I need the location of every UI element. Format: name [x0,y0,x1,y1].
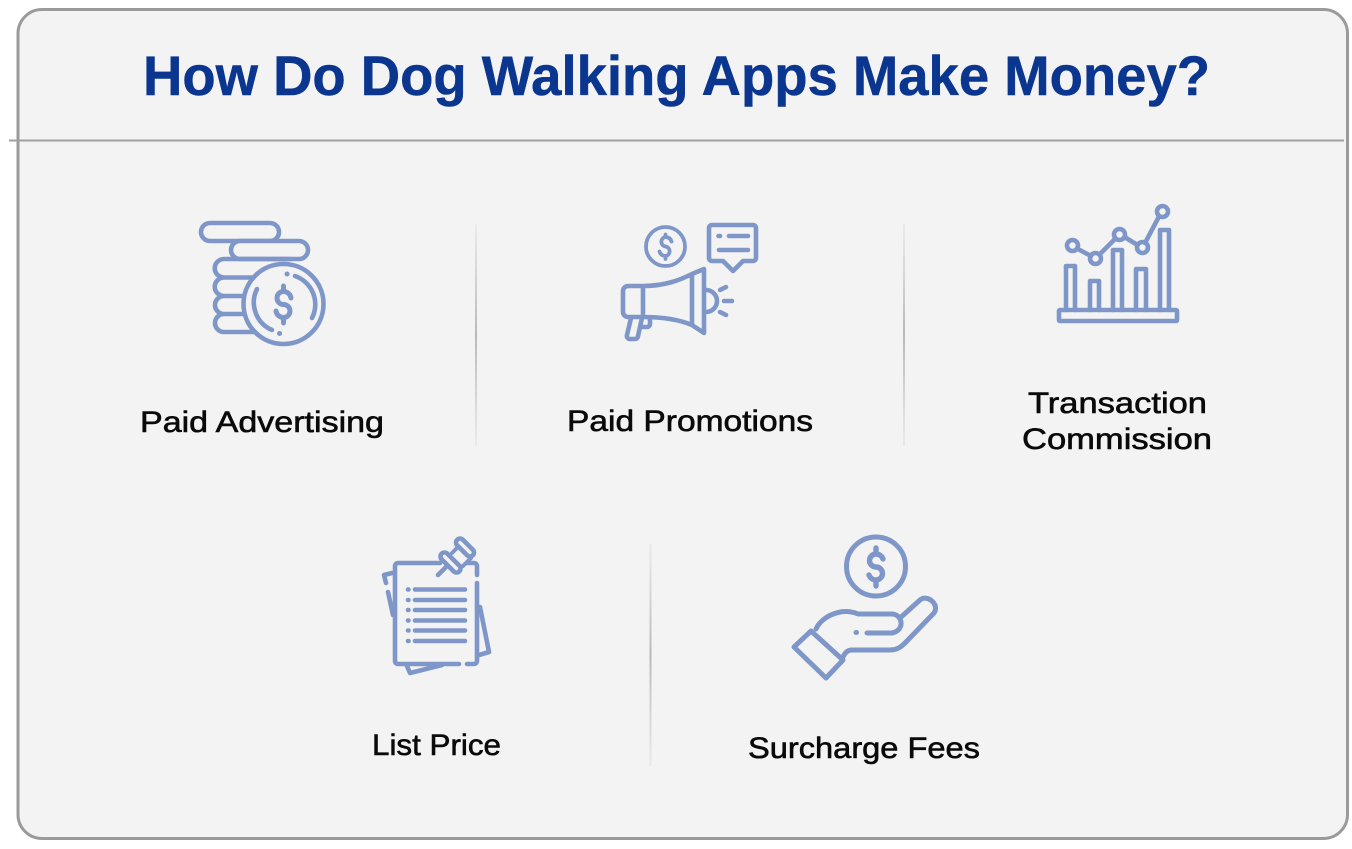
icon: coin stack [201,223,324,344]
label: paid promotions: Paid Promotions [567,405,813,438]
item: transaction commission [1022,206,1212,456]
icon: hand holding coin [794,537,936,678]
item: list price [372,537,501,762]
label: transaction commission: Transaction [1028,387,1207,420]
item: surcharge fees [748,537,980,765]
label: list price: List Price [372,729,501,762]
item: paid promotions [567,225,813,438]
label: transaction commission [1022,387,1212,456]
label: paid advertising: Paid Advertising [140,406,384,439]
label: transaction commission: Commission [1022,423,1212,456]
icon: pinned document list [384,537,489,673]
item: paid advertising [140,223,384,439]
title: How Do Dog Walking Apps Make Money? [143,44,1210,107]
icon: bar chart with trend line [1059,206,1177,321]
icon: megaphone with coin and speech bubble [623,225,756,339]
label: surcharge fees: Surcharge Fees [748,732,980,765]
